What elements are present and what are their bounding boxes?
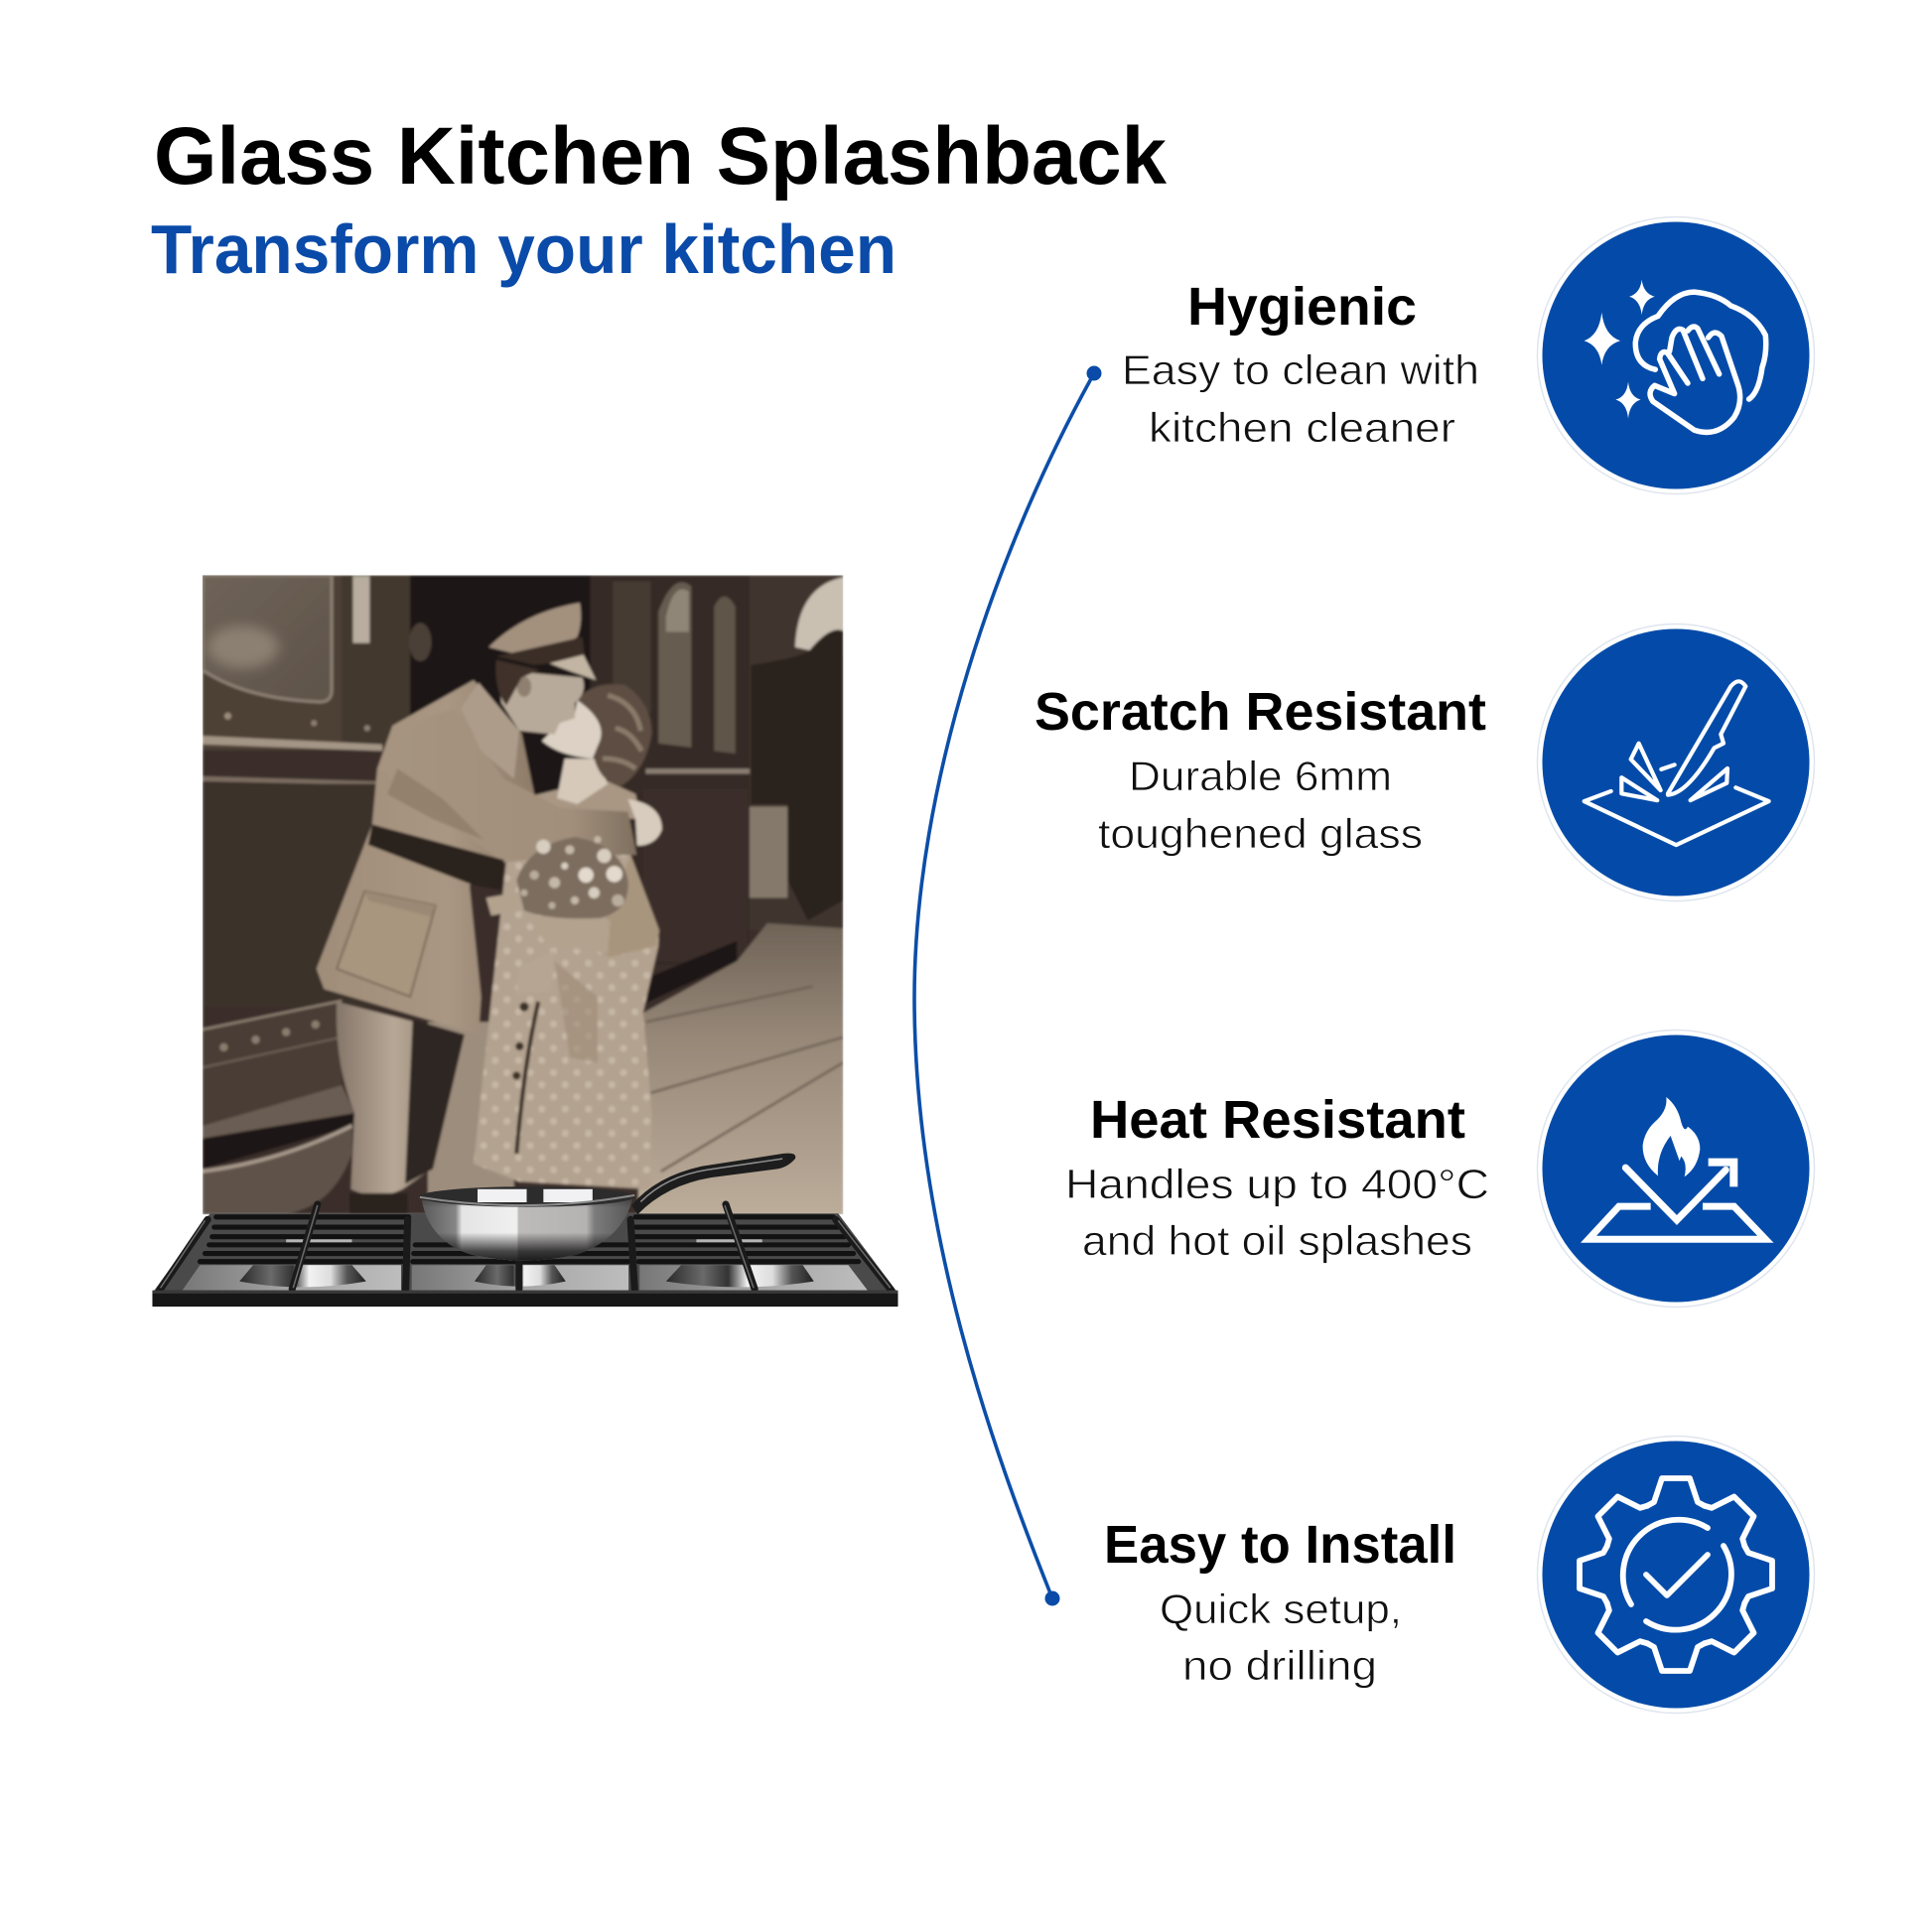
connector curve with end dots <box>914 365 1102 1606</box>
icon: knife scratching glass <box>1537 623 1815 901</box>
title: Glass Kitchen Splashback <box>154 111 1167 202</box>
benefit text: Heat Resistant: and hot oil splashes <box>1082 1217 1472 1264</box>
benefit text: Scratch Resistant <box>1035 682 1486 857</box>
subtitle: Transform your kitchen <box>151 210 897 288</box>
benefit text: Hygienic: Hygienic <box>1187 277 1417 337</box>
frying pan <box>419 1154 795 1261</box>
benefit text: Easy to Install <box>1104 1515 1456 1689</box>
bouquet <box>484 894 510 917</box>
benefit text: Easy to Install: no drilling <box>1182 1642 1377 1689</box>
benefit text: Easy to Install: Quick setup, <box>1160 1586 1402 1632</box>
benefit text: Heat Resistant <box>1065 1090 1489 1264</box>
icon: hand wiping with sparkles <box>1537 216 1815 494</box>
icon: gear with check mark <box>1537 1436 1815 1714</box>
benefit text: Hygienic: kitchen cleaner <box>1149 404 1455 451</box>
benefit text: Scratch Resistant: Scratch Resistant <box>1035 682 1486 742</box>
benefit text: Scratch Resistant: toughened glass <box>1098 810 1423 857</box>
hob with grates and burners <box>152 1204 897 1307</box>
benefit text: Scratch Resistant: Durable 6mm <box>1129 753 1392 799</box>
soldier upper body <box>317 680 534 1035</box>
woman <box>474 855 658 1189</box>
benefit text: Hygienic <box>1122 277 1479 451</box>
benefit text: Heat Resistant: Handles up to 400°C <box>1065 1161 1489 1207</box>
benefit text: Hygienic: Easy to clean with <box>1122 346 1479 393</box>
splashback photo: couple kissing by a train <box>203 575 843 1214</box>
icon: flame deflected off glass <box>1537 1031 1815 1307</box>
benefit text: Easy to Install: Easy to Install <box>1104 1515 1456 1575</box>
benefit text: Heat Resistant: Heat Resistant <box>1090 1090 1465 1150</box>
product image: splashback with hob and pan <box>152 575 897 1307</box>
burners <box>239 1265 366 1287</box>
soldier <box>336 1001 425 1195</box>
